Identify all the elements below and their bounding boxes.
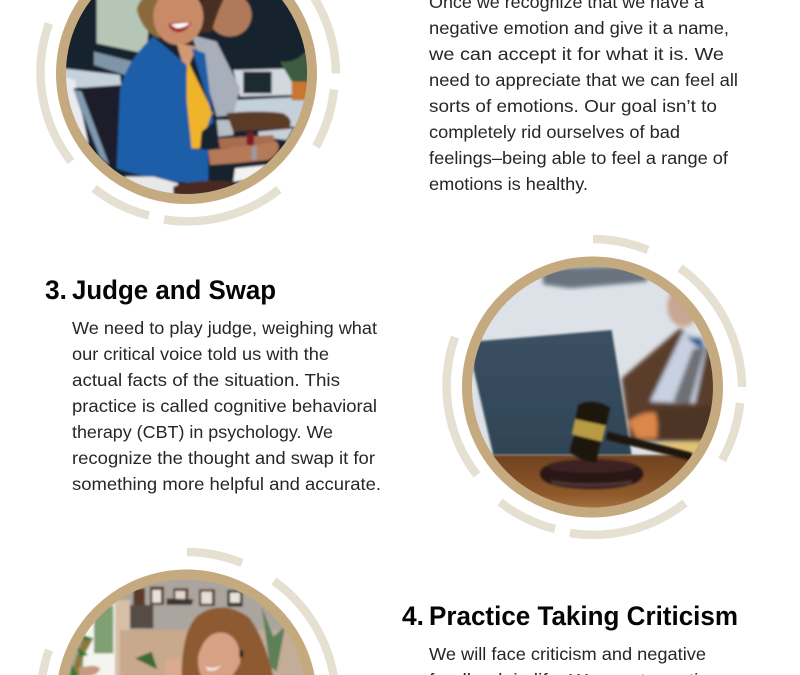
- text block: section 3 body: [72, 318, 381, 494]
- text block: section 2 body: completely rid ourselves of bad: [429, 122, 680, 142]
- text block: section 3 body: recognize the thought and swap it for: [72, 448, 375, 468]
- text block: section 2 body: we can accept it for what it is. We: [428, 44, 724, 64]
- text block: section 3 body: something more helpful and accurate.: [72, 474, 381, 494]
- text block: section 2 body: need to appreciate that we can feel all: [429, 70, 738, 90]
- decorative arc segments: [447, 239, 742, 535]
- heading: 3. Judge and Swap: Judge and Swap: [72, 275, 276, 305]
- text block: section 2 body: feelings–being able to feel a range of: [429, 148, 728, 168]
- heading: 4. Practice Taking Criticism: 4.: [402, 601, 424, 631]
- text block: section 4 body: We will face criticism and negative: [429, 644, 706, 664]
- decorative arc segments: [41, 552, 336, 675]
- text block: section 3 body: We need to play judge, weighing what: [72, 318, 377, 338]
- text block: section 2 body: [428, 0, 738, 194]
- text block: section 3 body: practice is called cognitive behavioral: [72, 396, 377, 416]
- text block: section 3 body: actual facts of the situation. This: [72, 370, 340, 390]
- panel: photo of woman on video call: [41, 552, 336, 675]
- heading: 3. Judge and Swap: 3.: [45, 275, 67, 305]
- text block: section 2 body: negative emotion and give it a name,: [429, 18, 729, 38]
- text block: section 3 body: our critical voice told us with the: [72, 344, 329, 364]
- text block: section 2 body: sorts of emotions. Our goal isn’t to: [429, 96, 717, 116]
- photo ring: [61, 574, 312, 675]
- text block: section 4 body: [429, 644, 719, 675]
- text block: section 2 body: emotions is healthy.: [429, 174, 588, 194]
- photo ring: [61, 0, 312, 199]
- decorative arc segments: [41, 0, 336, 221]
- photo ring: [467, 262, 718, 512]
- photo: office workers: [66, 0, 307, 194]
- photo: woman smiling: [68, 580, 304, 675]
- panel: photo of smiling office worker: [41, 0, 336, 221]
- photo: gavel on desk: [472, 266, 713, 508]
- panel: photo of gavel and laptop: [447, 239, 742, 535]
- text block: section 3 body: therapy (CBT) in psychology. We: [72, 422, 333, 442]
- heading: 4. Practice Taking Criticism: Practice Taking Criticism: [429, 601, 738, 631]
